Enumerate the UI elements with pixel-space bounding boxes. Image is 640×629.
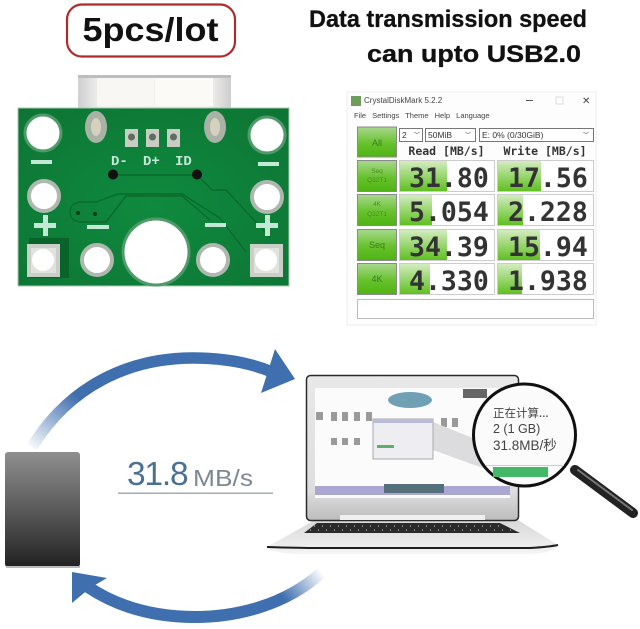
heading: data transmission speed: can upto USB2.0 (367, 41, 581, 68)
hinge (340, 515, 485, 520)
row: 4K: 1.938 (508, 266, 588, 297)
badge: 5pcs/lot: 5pcs/lot (82, 11, 219, 48)
magnifier text: 正在计算... (493, 405, 549, 421)
screen contents (315, 389, 510, 495)
badge: 5pcs/lot (67, 4, 235, 56)
screenshot: CrystalDiskMark panel (347, 92, 596, 325)
All button (358, 127, 396, 157)
row: Seq Q32T1: Seq (371, 168, 383, 175)
row: 4K: 4.330 (409, 266, 489, 297)
illustration: laptop (267, 376, 633, 554)
dropdowns: ﹀ (465, 132, 471, 139)
row: 4K Q32T1: 2.228 (508, 197, 588, 228)
All button: All (372, 138, 382, 148)
row: Seq Q32T1: 17.56 (508, 163, 588, 194)
magnifier text: 2 (1 GB) (493, 422, 540, 436)
dropdowns (400, 128, 594, 142)
row: 4K (358, 264, 594, 297)
keyboard (304, 523, 520, 533)
plated ring holes (29, 181, 282, 275)
dropdowns: 2 (402, 130, 407, 140)
mounting holes (25, 115, 285, 153)
silkscreen: pin labels (111, 154, 192, 170)
column headers: Write [MB/s] (503, 144, 587, 158)
magnifier lens (474, 384, 576, 486)
column headers: Read [MB/s] (408, 144, 485, 158)
speed label: 31.8 MB/s: 31.8 (127, 456, 188, 493)
magnifier handle (575, 470, 633, 513)
arrow: top arc to laptop (32, 349, 295, 447)
magnifier text: 31.8MB/秒 (493, 438, 557, 453)
silkscreen: pin labels: ID (175, 154, 192, 170)
row: Seq Q32T1: 31.80 (409, 163, 489, 194)
row: Seq Q32T1: Q32T1 (367, 177, 387, 184)
heading: data transmission speed: Data transmission speed (309, 6, 587, 33)
speed label: 31.8 MB/s (118, 456, 273, 494)
row: 4K Q32T1: Q32T1 (367, 211, 387, 218)
row: Seq: Seq (369, 240, 385, 250)
row: Seq: 15.94 (508, 232, 588, 263)
icon: external hard drive (5, 452, 80, 568)
silkscreen: plus and minus marks (31, 160, 279, 236)
traces (70, 175, 270, 252)
row: Seq Q32T1 (358, 160, 594, 194)
photo: green PCB USB breakout board (18, 75, 289, 286)
square pads (29, 246, 281, 275)
window title bar: ✕ (582, 96, 590, 107)
magnifier progress bar (486, 465, 564, 477)
dropdowns: ﹀ (583, 132, 589, 139)
window title bar (351, 96, 590, 107)
row: 4K Q32T1 (358, 194, 594, 228)
row: Seq (358, 230, 594, 263)
row: Seq: 34.39 (409, 232, 489, 263)
center hole (123, 219, 189, 285)
heading: data transmission speed (309, 6, 587, 68)
silkscreen: pin labels: D+ (143, 154, 160, 170)
connector shell (78, 75, 231, 109)
dropdowns: 50MiB (428, 130, 452, 140)
row: 4K: 4K (371, 274, 383, 284)
comment box (358, 300, 594, 318)
menu bar: File Settings Theme Help Language (354, 111, 490, 120)
dropdowns: E: 0% (0/30GiB) (482, 130, 544, 140)
board (18, 108, 289, 286)
oval pads (85, 111, 226, 143)
magnifier text (493, 405, 557, 453)
silkscreen: pin labels: D- (111, 154, 128, 170)
laptop lid (306, 376, 518, 520)
row: 4K Q32T1: 5.054 (409, 197, 489, 228)
vias (108, 170, 202, 180)
speed label: 31.8 MB/s: MB/s (193, 465, 253, 491)
arrow: bottom arc to drive (72, 572, 322, 617)
column headers (408, 144, 587, 158)
row: 4K Q32T1: 4K (373, 201, 382, 208)
data pads (125, 129, 180, 147)
dropdowns: ﹀ (414, 132, 420, 139)
window title bar: CrystalDiskMark 5.2.2 (364, 96, 443, 105)
screen (315, 388, 510, 498)
laptop deck (267, 520, 558, 554)
